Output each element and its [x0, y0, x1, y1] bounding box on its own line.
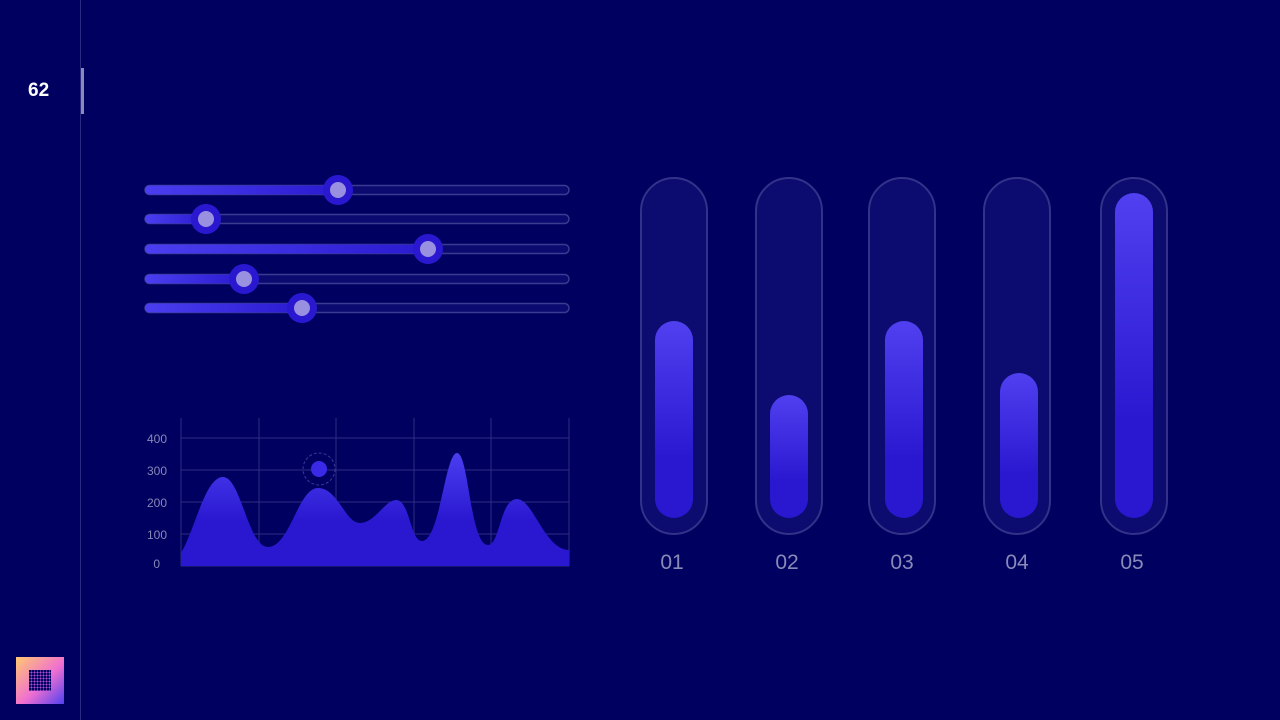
sidebar divider — [80, 0, 81, 720]
pill bar chart: 03 — [890, 551, 914, 574]
pill bar chart — [640, 177, 1168, 574]
area chart: 0 — [153, 557, 160, 571]
sliders panel — [144, 175, 570, 323]
area chart: 300 — [147, 464, 167, 478]
pill bar chart: 05 — [1120, 551, 1144, 574]
area chart: 200 — [147, 496, 167, 510]
area chart — [147, 418, 570, 571]
area chart: 400 — [147, 432, 167, 446]
pill bar chart: 01 — [660, 551, 684, 574]
logo icon — [16, 657, 64, 704]
page number marker — [81, 68, 84, 114]
pill bar chart: 02 — [775, 551, 799, 574]
area chart: 100 — [147, 528, 167, 542]
pill bar chart: 04 — [1005, 551, 1029, 574]
page number: 62 — [28, 80, 49, 101]
